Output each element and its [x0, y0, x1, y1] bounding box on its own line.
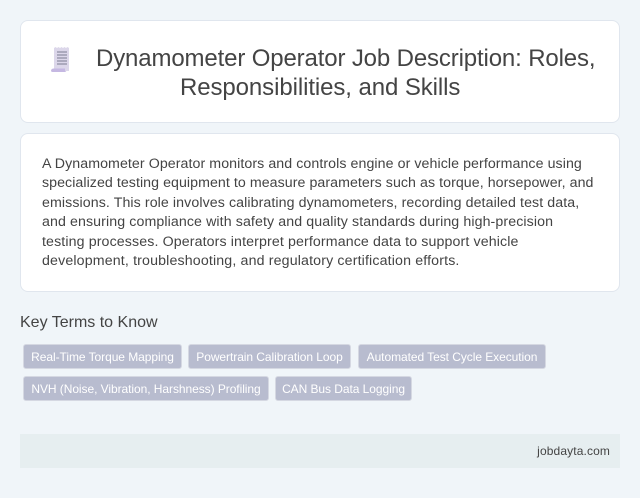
- description text: specialized testing equipment to measure parameters such as torque, horsepower, and: [42, 175, 594, 191]
- tag: automated test cycle: [358, 344, 546, 369]
- title: [96, 45, 595, 101]
- tag: powertrain calibration: [188, 344, 351, 369]
- description text: A Dynamometer Operator monitors and controls engine or vehicle performance using: [42, 156, 582, 172]
- tag: torque mapping: [23, 344, 182, 369]
- tag list: [23, 344, 546, 401]
- description text: emissions. This role involves calibrating dynamometers, recording detailed test data,: [42, 195, 579, 211]
- tag: NVH profiling: NVH (Noise, Vibration, Harshness) Profiling: [31, 382, 261, 396]
- tag: CAN bus: [275, 376, 412, 401]
- description text: [42, 156, 594, 269]
- title: Responsibilities, and Skills: [180, 74, 460, 101]
- panel: title card: [20, 20, 620, 123]
- tag: torque mapping: Real-Time Torque Mapping: [31, 350, 174, 364]
- footer bar: [20, 434, 620, 468]
- description text: testing processes. Operators interpret performance data to support vehicle: [42, 234, 519, 250]
- tag: NVH profiling: [23, 376, 269, 401]
- description text: and ensuring compliance with safety and quality standards during high-precision: [42, 214, 553, 230]
- tag: CAN bus: CAN Bus Data Logging: [282, 382, 405, 396]
- description text: development, troubleshooting, and regulatory certification efforts.: [42, 253, 460, 269]
- heading: key terms: Key Terms to Know: [20, 314, 158, 331]
- tag: automated test cycle: Automated Test Cycle Execution: [367, 350, 537, 364]
- panel: description card: [20, 133, 620, 292]
- footer source: jobdayta.com: [537, 444, 610, 458]
- icon: document scroll: [51, 47, 69, 72]
- title: Dynamometer Operator Job Description: Roles,: [96, 45, 595, 72]
- tag: powertrain calibration: Powertrain Calibration Loop: [196, 350, 343, 364]
